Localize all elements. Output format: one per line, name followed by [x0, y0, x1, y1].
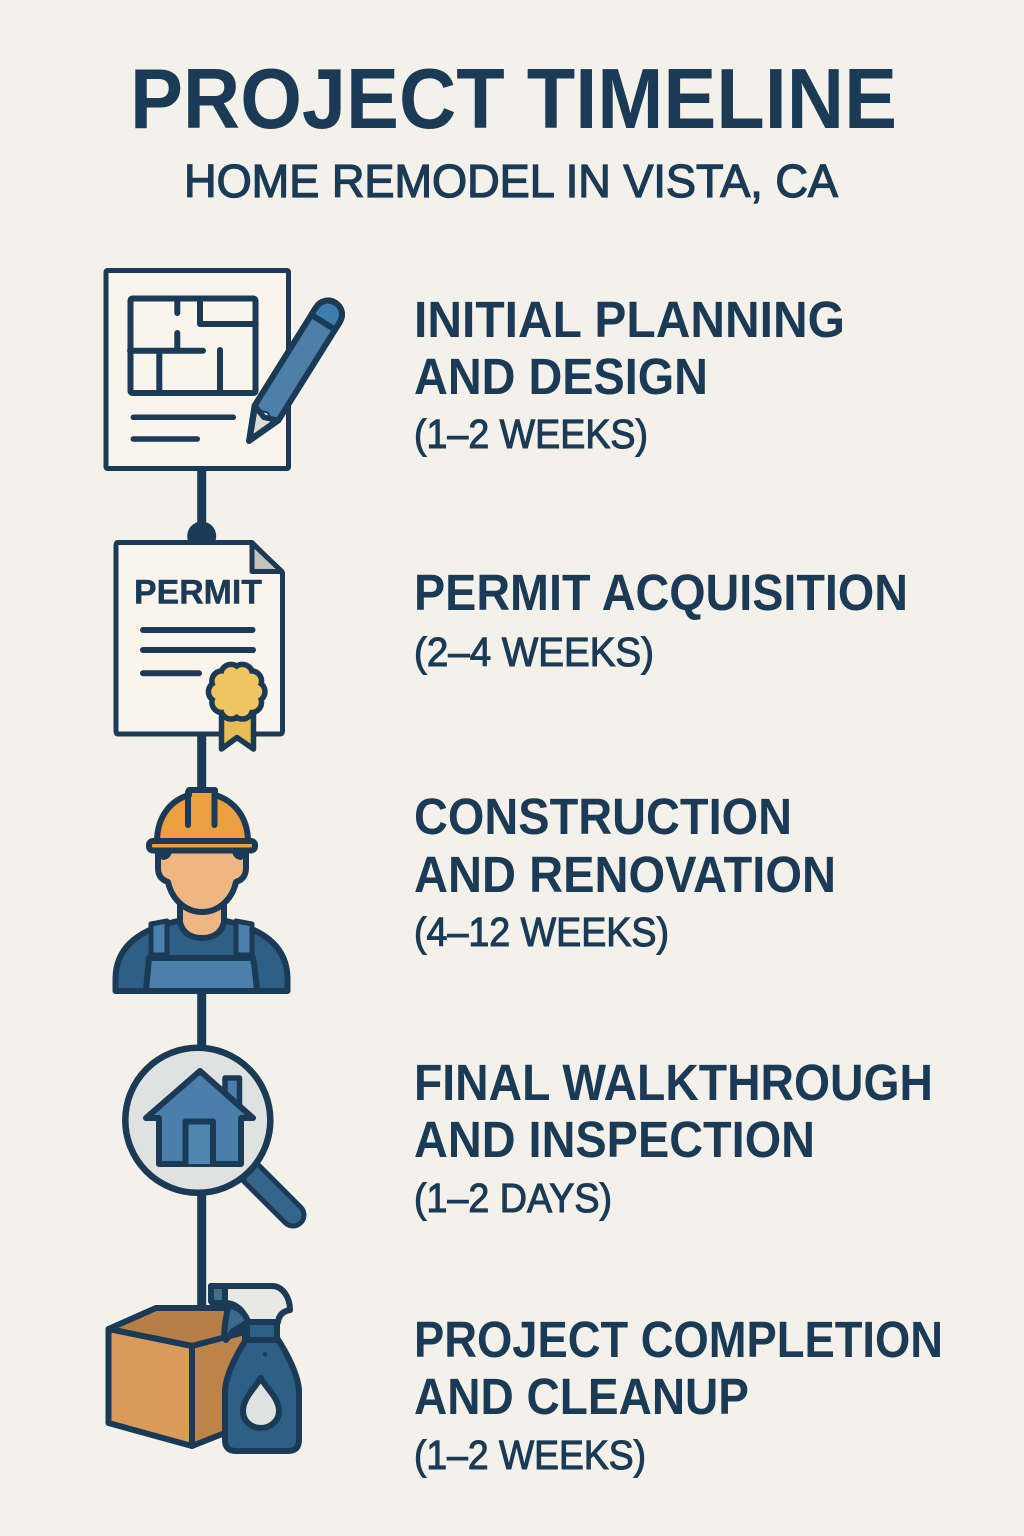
- icon: construction worker: [116, 790, 288, 991]
- title: PROJECT TIMELINE: [130, 52, 897, 147]
- step 5 text: PROJECT COMPLETION: [414, 1311, 943, 1368]
- icon: spray bottle: [211, 1286, 299, 1451]
- step 1 text: INITIAL PLANNING: [414, 291, 845, 348]
- step 2 text: (2–4 WEEKS): [414, 629, 654, 675]
- step 1 text: AND DESIGN: [414, 348, 708, 405]
- subtitle: HOME REMODEL IN VISTA, CA: [184, 155, 838, 207]
- step 4 text: [414, 1054, 933, 1221]
- step 1 text: (1–2 WEEKS): [414, 411, 648, 457]
- timeline connector line: [197, 468, 206, 1312]
- step 5 text: AND CLEANUP: [414, 1368, 749, 1425]
- step 3 text: AND RENOVATION: [414, 846, 836, 903]
- step 5 text: (1–2 WEEKS): [414, 1432, 646, 1478]
- icon: magnifying glass over house: [125, 1048, 293, 1215]
- step 3 text: [414, 788, 836, 955]
- step 4 text: FINAL WALKTHROUGH: [414, 1054, 933, 1111]
- icon: permit document with seal: [116, 542, 282, 749]
- step 4 text: AND INSPECTION: [414, 1111, 815, 1168]
- step 5 text: [414, 1311, 943, 1478]
- step 1 text: [414, 291, 845, 457]
- step 3 text: (4–12 WEEKS): [414, 909, 669, 955]
- connector dot: [187, 522, 216, 550]
- icon: floor plan document with pencil: [106, 270, 347, 468]
- step 4 text: (1–2 DAYS): [414, 1175, 612, 1221]
- icon: cardboard box: [108, 1308, 245, 1446]
- icon: permit document with seal: PERMIT: [134, 574, 262, 612]
- step 3 text: CONSTRUCTION: [414, 788, 792, 845]
- step 2 text: PERMIT ACQUISITION: [414, 564, 908, 621]
- step 2 text: [414, 564, 908, 675]
